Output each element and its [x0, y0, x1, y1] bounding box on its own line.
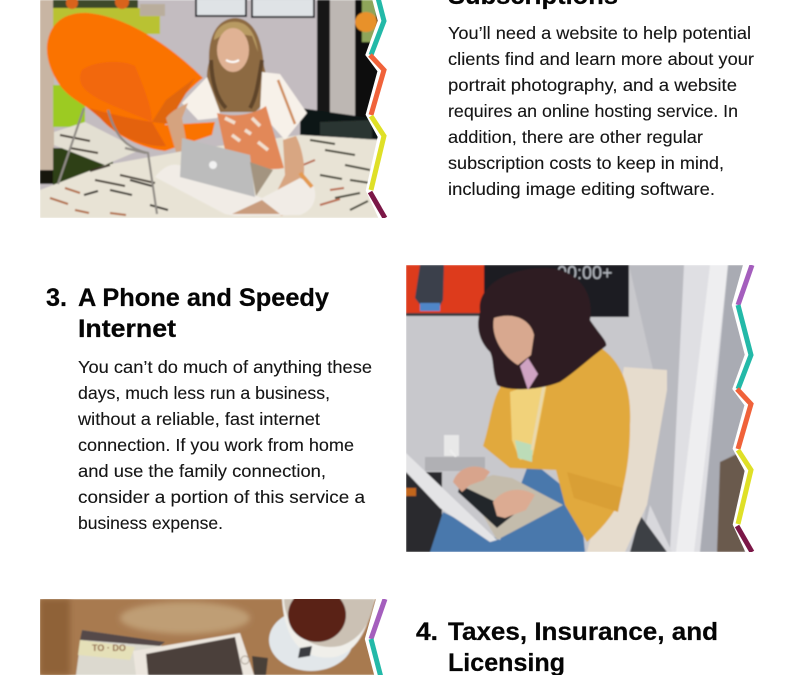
body text: phone and internet: without a reliable, fast internet [77, 409, 320, 429]
body text: subscriptions: addition, there are other regular [448, 127, 703, 147]
body text: phone and internet: You can’t do much of anything these [78, 357, 372, 377]
body text: subscriptions: requires an online hosting service. In [448, 101, 738, 121]
heading: 3. A Phone and Speedy Internet [46, 284, 329, 343]
photo: woman with laptop on orange chair [40, 0, 388, 218]
decorative zigzag edge [732, 265, 756, 552]
decorative zigzag edge [365, 0, 390, 218]
decorative zigzag edge [364, 599, 390, 675]
body text: phone and internet: consider a portion of this service a [78, 487, 365, 507]
panel: taxes, insurance and licensing heading: Taxes, Insurance, and [448, 618, 718, 646]
body text: subscriptions: including image editing software. [448, 179, 715, 199]
body text: subscriptions: portrait photography, and a website [448, 75, 737, 95]
body text: subscriptions: clients find and learn more about your [448, 49, 754, 69]
body text: subscriptions: subscription costs to keep in mind, [448, 153, 724, 173]
panel: taxes, insurance and licensing heading [416, 618, 718, 675]
photo: phone, to-do note and coffee cup on wooden table [40, 599, 388, 675]
heading: 3. A Phone and Speedy Internet: Internet [78, 315, 177, 343]
body text: subscriptions [448, 23, 754, 199]
heading: 3. A Phone and Speedy Internet: A Phone and Speedy [78, 284, 329, 312]
photo: woman in yellow jacket with laptop: :00:00+ [552, 263, 613, 283]
photo: woman in yellow jacket with laptop [406, 265, 754, 552]
heading: 3. A Phone and Speedy Internet: 3. [46, 284, 67, 312]
body text: phone and internet: and use the family connection, [78, 461, 326, 481]
photo: phone, to-do note and coffee cup on wooden table: TO · DO [92, 643, 126, 653]
body text: phone and internet [77, 357, 372, 533]
panel: taxes, insurance and licensing heading: 4. [416, 618, 438, 646]
panel: subscriptions text [448, 0, 754, 199]
body text: phone and internet: business expense. [78, 513, 223, 533]
body text: subscriptions: You’ll need a website to help potential [448, 23, 751, 43]
body text: phone and internet: days, much less run a business, [78, 383, 330, 403]
body text: phone and internet: connection. If you work from home [78, 435, 354, 455]
panel: phone and internet text [46, 284, 372, 533]
